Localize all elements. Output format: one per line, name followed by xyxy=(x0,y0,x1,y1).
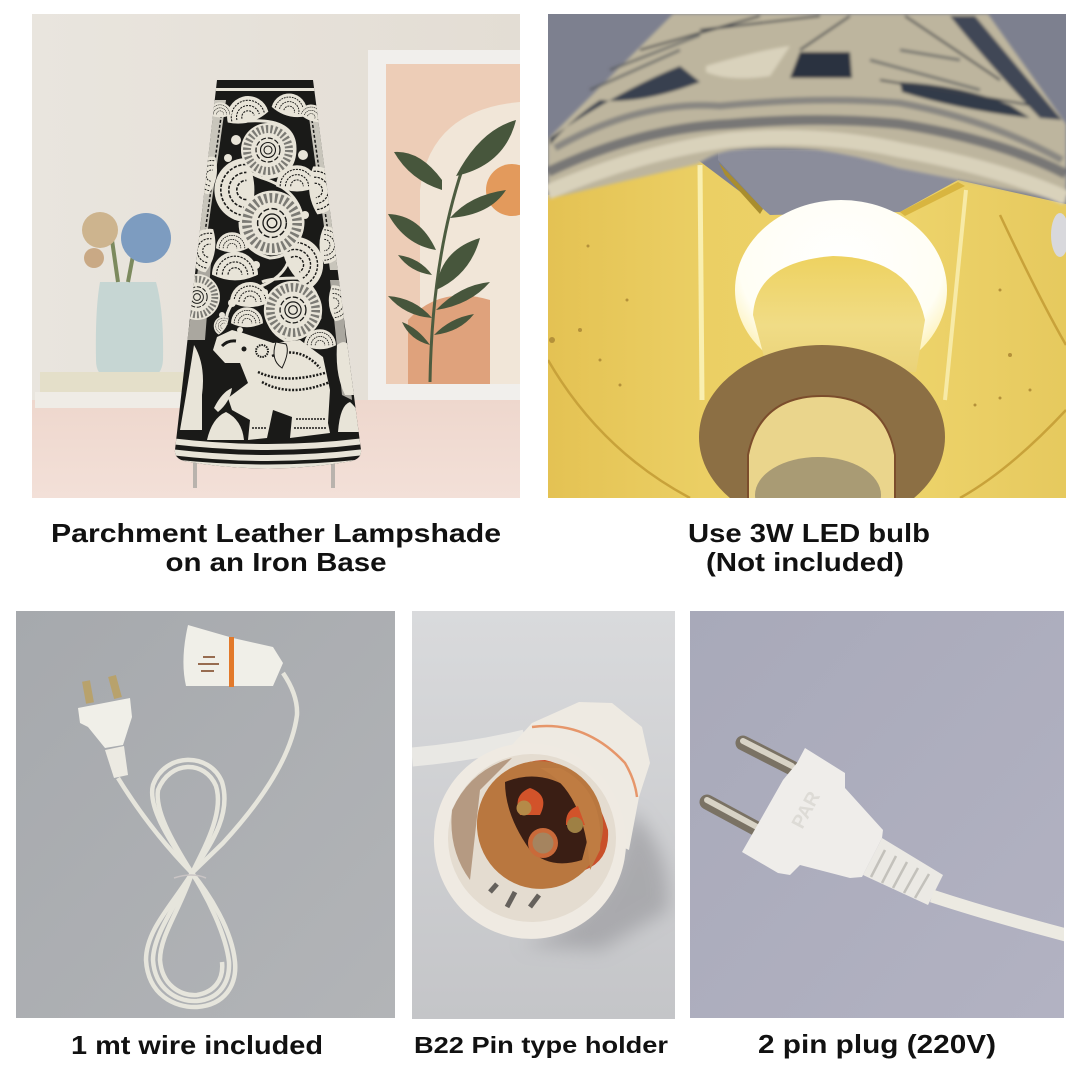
window through shade xyxy=(718,150,958,215)
caption: lampshade: Parchment Leather Lampshade xyxy=(51,518,501,548)
caption: plug: 2 pin plug (220V) xyxy=(758,1029,996,1059)
vines xyxy=(226,121,320,340)
coiled wire xyxy=(118,673,297,1007)
elephant xyxy=(213,330,330,440)
holder ring xyxy=(699,345,945,498)
plug body xyxy=(742,748,883,878)
dark painted patches xyxy=(550,66,700,145)
speckles xyxy=(549,244,1032,406)
holder mouth xyxy=(434,753,626,939)
plug strain relief xyxy=(863,838,943,905)
small leaves xyxy=(219,135,309,333)
panel: LED bulb photo xyxy=(548,14,1069,533)
vase with flowers xyxy=(82,212,171,377)
bulb collar xyxy=(753,256,925,372)
panel: plug photo xyxy=(690,611,1066,1018)
tie at wire crossing xyxy=(174,875,206,878)
lit shade interior xyxy=(548,160,1066,498)
caption: wire: 1 mt wire included xyxy=(71,1030,323,1060)
caption: bulb: Use 3W LED bulb xyxy=(688,518,930,548)
panel: holder photo xyxy=(412,611,675,1019)
side patterned strips xyxy=(187,100,352,400)
holder body xyxy=(524,702,650,850)
lampshade with Kalamkari pattern xyxy=(170,78,365,480)
framed art print xyxy=(368,50,520,400)
cable xyxy=(412,739,525,757)
lamp legs xyxy=(195,462,333,488)
books xyxy=(35,372,190,408)
plug pins xyxy=(707,741,792,829)
panel: lamp photo xyxy=(32,14,538,498)
flowers xyxy=(241,123,295,177)
base stripes xyxy=(175,438,361,468)
white object at right edge xyxy=(1051,213,1066,257)
cord xyxy=(932,896,1066,935)
caption: iron base: on an Iron Base xyxy=(166,547,386,577)
side elephant and bushes xyxy=(180,342,362,440)
panel: wire photo xyxy=(16,611,395,1018)
copper contact xyxy=(476,761,603,889)
vents xyxy=(490,884,539,907)
shade ribs and wire hoops xyxy=(700,165,702,400)
caption: not included: (Not included) xyxy=(706,547,904,577)
fan motifs xyxy=(227,96,268,124)
plug xyxy=(78,676,132,778)
LED bulb xyxy=(735,200,947,350)
orange wires xyxy=(495,760,608,870)
rim xyxy=(216,88,314,91)
holder shadow xyxy=(520,810,668,950)
table surface xyxy=(32,400,520,498)
socket xyxy=(183,625,283,687)
holder socket xyxy=(748,396,895,510)
caption: holder: B22 Pin type holder xyxy=(414,1032,668,1058)
socket inner xyxy=(755,457,881,498)
embossed brand mark: PAR xyxy=(788,788,825,832)
shade printed exterior rim xyxy=(548,14,1066,204)
